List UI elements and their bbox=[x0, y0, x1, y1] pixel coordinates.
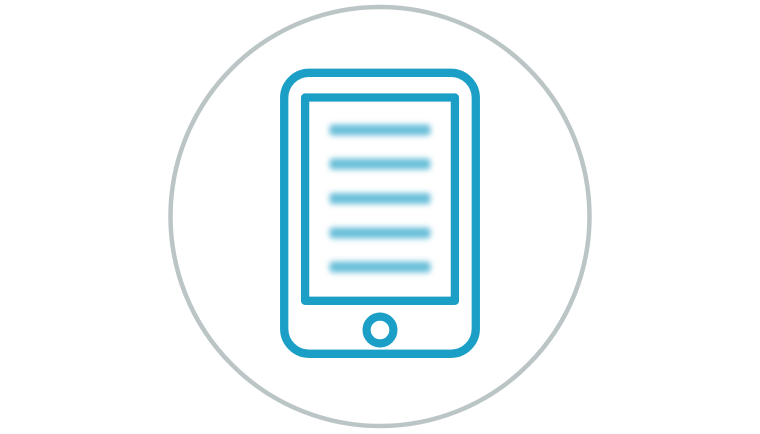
circle outline bbox=[170, 7, 590, 426]
home button bbox=[367, 317, 393, 343]
tablet screen bbox=[305, 98, 455, 301]
icon: tablet bbox=[284, 73, 476, 354]
tablet body bbox=[284, 73, 476, 354]
blurred text lines bbox=[330, 124, 430, 272]
